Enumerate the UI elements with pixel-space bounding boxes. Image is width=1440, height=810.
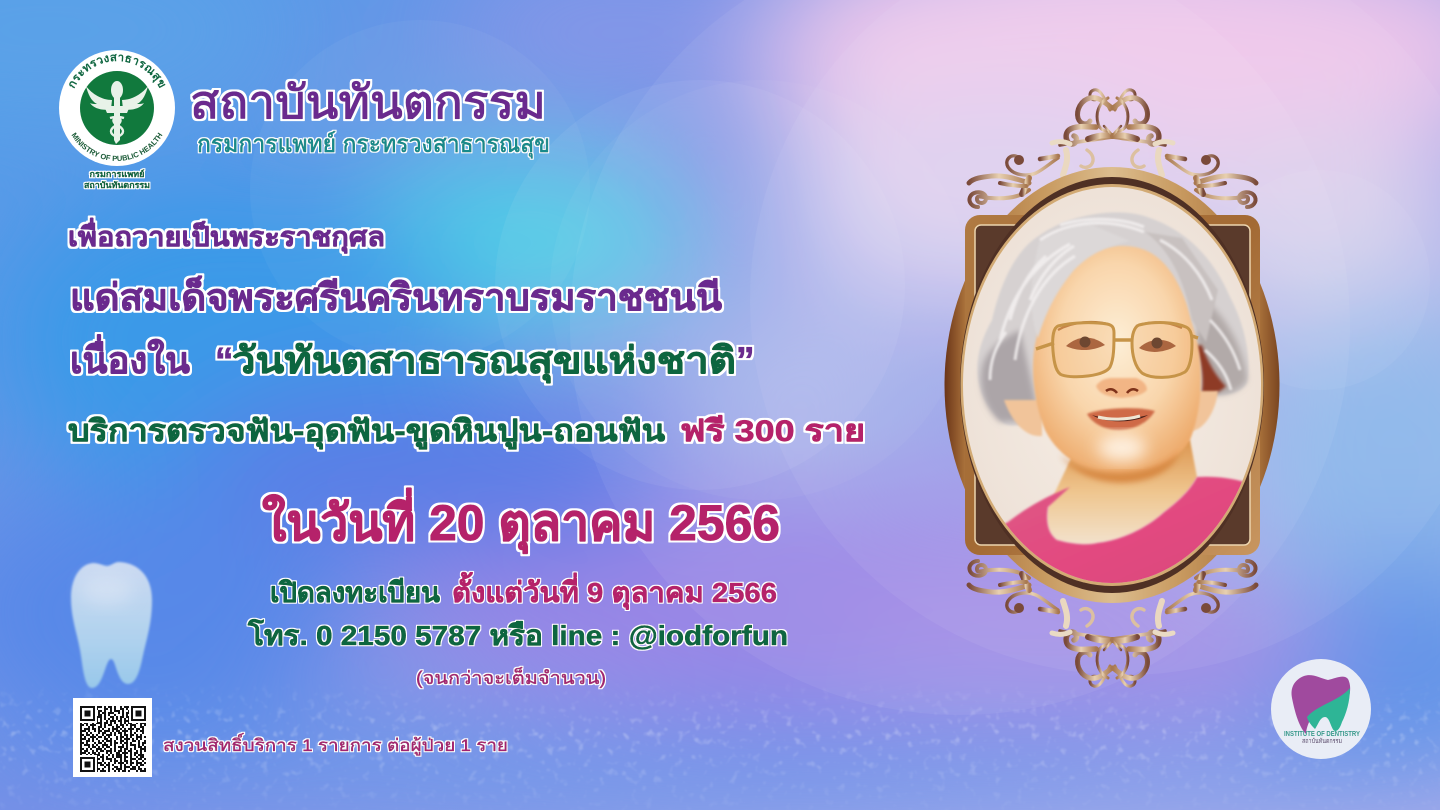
event date: ในวันที่ 20 ตุลาคม 2566 — [262, 488, 780, 554]
title: institute name: สถาบันทันตกรรม — [190, 76, 546, 128]
service line — [68, 415, 865, 450]
heading line 3 — [70, 334, 754, 384]
logo: Ministry of Public Health — [59, 50, 175, 166]
logo name: INSTITUTE OF DENTISTRY — [1284, 729, 1360, 738]
neck — [1047, 440, 1197, 544]
heading line 2: แด่สมเด็จพระศรีนครินทราบรมราชชนนี — [70, 274, 722, 318]
icon: caduceus — [86, 81, 148, 144]
decorative translucent circles — [250, 0, 1440, 715]
heading line 3: ” — [736, 340, 754, 381]
mouth — [1087, 408, 1155, 430]
ears — [1004, 400, 1042, 436]
subtitle: department: กรมการแพทย์ กระทรวงสาธารณสุข — [197, 130, 550, 159]
heading line 3: วันทันตสาธารณสุขแห่งชาติ — [232, 340, 736, 384]
contact line: โทร. 0 2150 5787 หรือ line : @iodforfun — [247, 618, 788, 651]
registration line: ตั้งแต่วันที่ 9 ตุลาคม 2566 — [452, 571, 777, 610]
nose — [1096, 378, 1147, 398]
registration line — [270, 571, 777, 610]
hair — [977, 212, 1249, 426]
sweater — [1004, 475, 1242, 583]
jaw shadow — [1060, 452, 1180, 483]
logo caption — [84, 169, 150, 190]
service line: ฟรี 300 ราย — [680, 415, 865, 448]
ring text: English ministry name: MINISTRY OF PUBLIC HEALTH — [72, 132, 162, 161]
logo Thai name: สถาบันทันตกรรม — [1302, 737, 1342, 745]
eyes — [1058, 322, 1182, 352]
icon: purple upper tooth — [1292, 675, 1350, 734]
registration line: เปิดลงทะเบียน — [270, 577, 440, 608]
heading line 3: “ — [215, 340, 234, 381]
logo caption: กรมการแพทย์ — [90, 169, 145, 179]
QR code — [73, 698, 152, 777]
heading line 3: เนื่องใน — [70, 334, 190, 381]
hair over forehead — [1036, 233, 1218, 340]
glasses — [1036, 323, 1198, 377]
chin highlight — [1098, 435, 1146, 461]
note: until full: (จนกว่าจะเต็มจำนวน) — [416, 666, 606, 688]
icon: tooth — [71, 562, 152, 688]
face — [1033, 246, 1201, 474]
sparkle band at bottom — [0, 694, 1440, 802]
portrait illustration — [960, 185, 1265, 600]
ornament: bottom flourishes — [969, 561, 1256, 686]
portrait frame — [944, 167, 1280, 603]
ornament: top flourishes — [969, 90, 1256, 207]
logo: Institute of Dentistry — [1271, 659, 1371, 759]
heading line 1: เพื่อถวายเป็นพระราชกุศล — [68, 217, 385, 254]
service line: บริการตรวจฟัน-อุดฟัน-ขูดหินปูน-ถอนฟัน — [68, 415, 666, 450]
ring text: Thai ministry name: กระทรวงสาธารณสุข — [69, 54, 166, 88]
hair strands — [990, 219, 1240, 390]
logo caption: สถาบันทันตกรรม — [84, 180, 150, 190]
icon: teal lower tooth — [1307, 688, 1350, 731]
note: rights: สงวนสิทธิ์บริการ 1 รายการ ต่อผู้ป่วย 1 ราย — [163, 733, 508, 756]
